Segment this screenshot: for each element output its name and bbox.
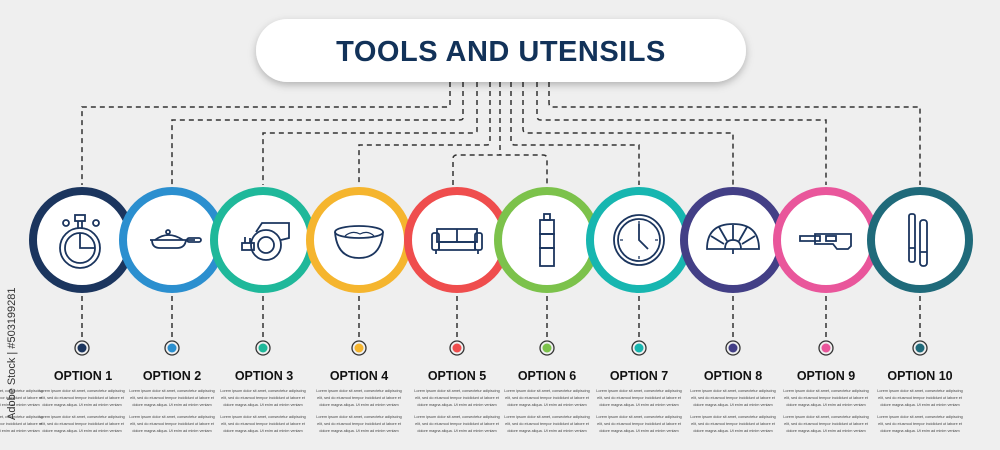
description texts	[0, 389, 963, 433]
option labels	[54, 369, 953, 383]
option 6	[498, 191, 596, 289]
icon: hand fan	[707, 224, 759, 254]
option labels: OPTION 5	[428, 369, 486, 383]
option 5	[408, 191, 506, 289]
option 9	[777, 191, 875, 289]
watermark id: Adobe Stock | #503199281	[6, 287, 18, 420]
title: TOOLS AND UTENSILS	[336, 36, 666, 68]
icon: bottles	[540, 214, 554, 266]
icon: stopwatch	[60, 215, 100, 268]
icon: circular saw	[242, 223, 289, 260]
option labels: OPTION 6	[518, 369, 576, 383]
option labels: OPTION 9	[797, 369, 855, 383]
option labels: OPTION 8	[704, 369, 762, 383]
icon: sofa	[432, 229, 482, 254]
option labels: OPTION 1	[54, 369, 112, 383]
option 3	[214, 191, 312, 289]
option 4	[310, 191, 408, 289]
icon: cutter knife	[800, 234, 851, 249]
lower dashed lines	[82, 296, 920, 340]
icon: pan	[150, 230, 201, 248]
icon: bowl	[335, 226, 383, 258]
option 10	[871, 191, 969, 289]
connectors	[82, 82, 920, 185]
icon: clock	[614, 215, 664, 265]
dots	[75, 341, 927, 355]
title	[256, 19, 746, 82]
option 7	[590, 191, 688, 289]
option 1	[33, 191, 131, 289]
icon: chopsticks	[909, 214, 927, 266]
option 2	[123, 191, 221, 289]
option 8	[684, 191, 782, 289]
option labels: OPTION 4	[330, 369, 388, 383]
option labels: OPTION 2	[143, 369, 201, 383]
option labels: OPTION 7	[610, 369, 668, 383]
option labels: OPTION 3	[235, 369, 293, 383]
option labels: OPTION 10	[887, 369, 953, 383]
